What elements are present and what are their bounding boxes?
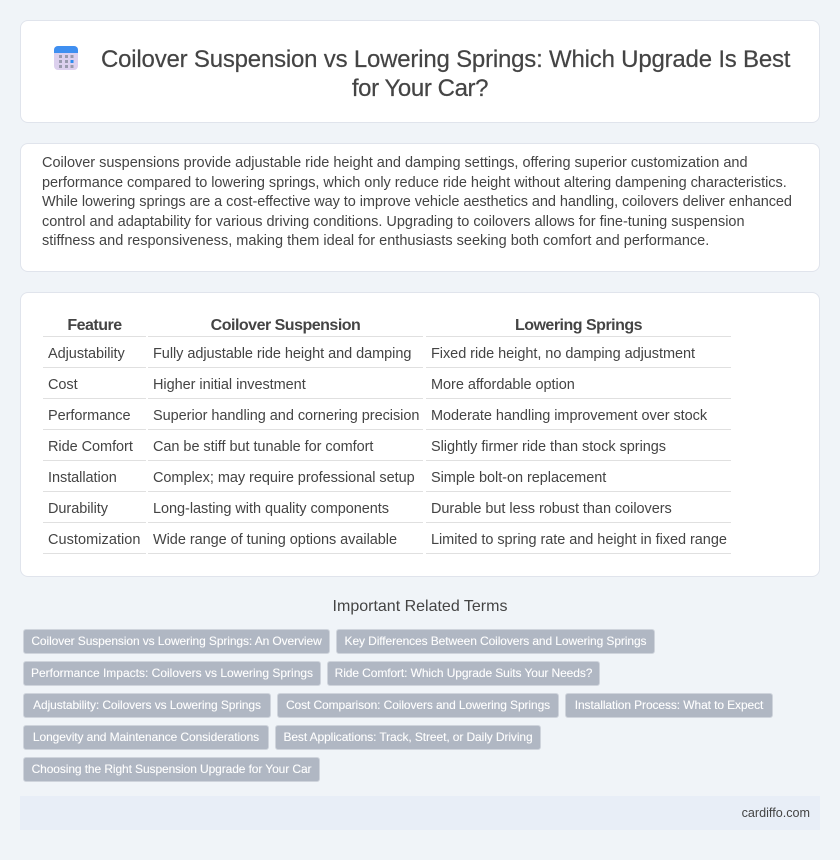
table rows: Coilover Suspension: [211, 317, 360, 334]
table rows: Fully adjustable ride height and damping: [153, 346, 411, 362]
summary text: stiffness and responsiveness, making them ideal for enthusiasts seeking both comfort and performance.: [42, 233, 709, 249]
table rows: Fixed ride height, no damping adjustment: [431, 346, 695, 362]
table rows: Wide range of tuning options available: [153, 532, 397, 548]
related term tags: Choosing the Right Suspension Upgrade for Your Car: [32, 762, 311, 776]
table rows: Limited to spring rate and height in fixed range: [431, 532, 727, 548]
summary card: [20, 143, 820, 272]
related term tags: Installation Process: What to Expect: [575, 698, 763, 712]
related terms heading: Important Related Terms: [333, 598, 507, 615]
comparison table: [43, 317, 731, 554]
table rows: Superior handling and cornering precision: [153, 408, 419, 424]
table rows: Complex; may require professional setup: [153, 470, 415, 486]
table rows: Slightly firmer ride than stock springs: [431, 439, 666, 455]
footer text: cardiffo.com: [742, 806, 810, 820]
table rows: [43, 317, 731, 554]
related term tags: Performance Impacts: Coilovers vs Lowering Springs: [31, 666, 313, 680]
table rows: Simple bolt-on replacement: [431, 470, 606, 486]
table rows: Higher initial investment: [153, 377, 306, 393]
title: Coilover Suspension vs Lowering Springs: Which Upgrade Is Best: [101, 46, 790, 73]
related term tags: Coilover Suspension vs Lowering Springs: An Overview: [31, 634, 322, 648]
table rows: Cost: [48, 377, 78, 393]
summary text: Coilover suspensions provide adjustable ride height and damping settings, offering superior customization and: [42, 155, 748, 171]
table rows: Adjustability: [48, 346, 125, 362]
related term tags: Ride Comfort: Which Upgrade Suits Your Needs?: [335, 666, 592, 680]
table rows: Long-lasting with quality components: [153, 501, 389, 517]
related term tags: Adjustability: Coilovers vs Lowering Springs: [33, 698, 261, 712]
table rows: Feature: [67, 317, 122, 334]
table rows: More affordable option: [431, 377, 575, 393]
summary text: control and adaptability for various driving conditions. Upgrading to coilovers allows for fine-tuning suspension: [42, 214, 745, 230]
table rows: Ride Comfort: [48, 439, 133, 455]
related term tags: Key Differences Between Coilovers and Lowering Springs: [345, 634, 646, 648]
header card: [20, 20, 820, 123]
table rows: Durability: [48, 501, 108, 517]
table rows: Customization: [48, 532, 141, 548]
title: for Your Car?: [352, 75, 488, 102]
table rows: Installation: [48, 470, 117, 486]
table rows: Moderate handling improvement over stock: [431, 408, 707, 424]
table rows: Performance: [48, 408, 130, 424]
related term tags: [23, 629, 773, 782]
summary text: While lowering springs are a cost-effective way to improve vehicle aesthetics and handling, coilovers deliver enhanced: [42, 194, 792, 210]
table rows: Can be stiff but tunable for comfort: [153, 439, 373, 455]
related term tags: Cost Comparison: Coilovers and Lowering Springs: [286, 698, 550, 712]
summary text: [42, 155, 792, 249]
footer bar: [20, 796, 820, 830]
title: [101, 46, 790, 102]
table card: [20, 292, 820, 577]
table rows: Durable but less robust than coilovers: [431, 501, 672, 517]
related term tags: Longevity and Maintenance Considerations: [33, 730, 259, 744]
icon: calendar: [54, 46, 78, 70]
related term tags: Best Applications: Track, Street, or Daily Driving: [283, 730, 533, 744]
summary text: performance compared to lowering springs, which only reduce ride height without altering dampening characteristics.: [42, 175, 787, 191]
table rows: Lowering Springs: [515, 317, 642, 334]
